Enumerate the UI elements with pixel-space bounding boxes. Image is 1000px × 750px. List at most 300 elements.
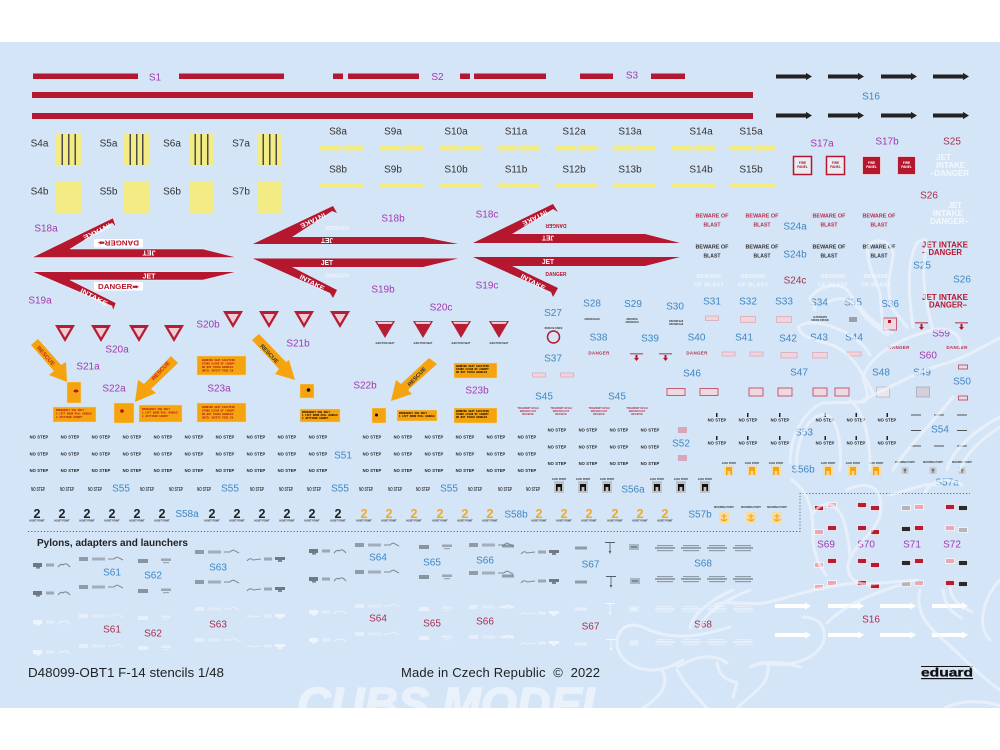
mooring point decals S57b xyxy=(688,506,787,523)
no step stencils S51: NO STEP xyxy=(425,452,444,456)
panel: small stencils S27 to S50: S59 xyxy=(932,328,950,340)
hoist point row S58a: 2 xyxy=(209,507,216,521)
panel: small stencils S27 to S50: S50 xyxy=(953,376,971,388)
labels S61 to S68: S62 xyxy=(144,628,162,640)
panel: small stencils S27 to S50: RECEIVE xyxy=(631,412,643,416)
intake arrow S19c: DANGER xyxy=(546,272,567,278)
hoist point row S58b: HOIST POINT xyxy=(632,520,648,522)
panel: S4 to S7 yellow patches xyxy=(31,134,282,213)
panel: fire panel decals S17: PANEL xyxy=(901,165,912,169)
jack point decals S56b xyxy=(722,462,884,476)
no step stencils S51: NO STEP xyxy=(61,468,80,473)
panel: beware of blast S24: BEWARE OF xyxy=(746,244,779,250)
panel: beware of blast S24: BLAST xyxy=(704,254,721,260)
hoist point row S58b: 2 xyxy=(361,507,368,521)
dotted section divider xyxy=(28,494,970,532)
panel: small markings S69 to S72: S71 xyxy=(903,540,921,550)
mooring point decals S57b: MOORING POINT xyxy=(767,506,787,509)
panel: beware of blast S24: S24a xyxy=(783,222,807,232)
no step stencils S51: NO STEP xyxy=(154,452,173,456)
labels S61 to S68: S68 xyxy=(694,620,712,630)
panel: jet intake danger stencils S25 S26: S25 xyxy=(943,136,961,148)
no step stencils S51: NO STEP xyxy=(216,434,235,440)
panel: S8 to S15 yellow bars: S11a xyxy=(505,126,528,138)
no step stencils S51: NO STEP xyxy=(487,434,506,440)
hoist point row S58b: 2 xyxy=(586,507,593,521)
panel: small stencils S27 to S50: ABCDEFGHI xyxy=(669,320,683,323)
triangles S20c with ejection seat text: EJECTION SEAT xyxy=(376,342,395,345)
S53 no step with arrow: NO STEP xyxy=(771,440,790,446)
panel: beware of blast S24: OF BLAST xyxy=(861,282,892,288)
no step stencils S51: NO STEP xyxy=(30,468,49,473)
outlined no step row S55: S55 xyxy=(331,484,349,494)
no step stencils S51: NO STEP xyxy=(641,444,660,450)
panel: beware of blast S24: BLAST xyxy=(870,254,888,260)
outlined no step row S55: S55 xyxy=(112,484,130,494)
panel: small stencils S27 to S50: S44 xyxy=(845,332,863,344)
panel: small stencils S27 to S50: BROADCAST xyxy=(629,409,646,413)
label S3: S3 xyxy=(626,70,639,82)
labels S61 to S68: S64 xyxy=(369,614,387,624)
panel: beware of blast S24: BEWARE xyxy=(740,274,766,280)
panel: fire panel decals S17: FIRE xyxy=(903,161,910,165)
S53 no step with arrow: NO STEP xyxy=(878,440,897,446)
panel: small stencils S27 to S50: BROADCAST xyxy=(591,409,608,413)
hoist point row S58a: 2 xyxy=(109,507,116,521)
panel: jet intake danger stencils S25 S26: DANGER– xyxy=(930,217,970,226)
panel: small stencils S27 to S50: S30 xyxy=(666,302,684,312)
labels S61 to S68: S66 xyxy=(476,616,494,628)
intake arrow S19c: JET xyxy=(542,259,555,266)
panel: beware of blast S24: S24b xyxy=(783,250,807,260)
panel: jet intake danger stencils S25 S26: DANGER– xyxy=(929,300,968,310)
no step stencils S51: NO STEP xyxy=(548,461,567,466)
orange placards red text: 2 JETTISON CANOPY xyxy=(56,416,83,419)
panel: S4 to S7 yellow patches: S4a xyxy=(31,138,49,150)
panel: fire panel decals S17: S17a xyxy=(810,138,834,150)
panel: small stencils S27 to S50: DANGER xyxy=(686,350,708,356)
panel: beware of blast S24: BEWARE OF xyxy=(862,214,896,220)
panel: small stencils S27 to S50: BROADCAST xyxy=(553,409,570,413)
mooring point decals S57a: MOORING POINT xyxy=(923,461,943,464)
labels S61 to S68: S68 xyxy=(694,558,712,570)
no step stencils S51: NO STEP xyxy=(30,452,49,456)
no step stencils S51: NO STEP xyxy=(425,468,444,473)
hoist point row S58a: 2 xyxy=(159,507,166,521)
hoist point row S58b: HOIST POINT xyxy=(657,520,673,522)
labels S20 to S23: S21b xyxy=(286,338,310,350)
panel: small stencils S27 to S50: S42 xyxy=(779,334,797,344)
panel: S8 to S15 yellow bars: S9b xyxy=(384,164,402,176)
panel: S8 to S15 yellow bars: S15b xyxy=(739,164,763,176)
mooring point decals S57a xyxy=(895,461,972,488)
footer: sheet code: D48099-OBT1 F-14 stencils 1/48 xyxy=(28,665,224,680)
no step stencils S51: NO STEP xyxy=(394,452,413,456)
hoist point row S58a: 2 xyxy=(134,507,141,521)
no step stencils S51: NO STEP xyxy=(487,452,506,456)
panel: beware of blast S24: BEWARE xyxy=(820,274,846,280)
panel: small stencils S27 to S50: S45 xyxy=(608,392,626,402)
panel: small stencils S27 to S50: TRANSMIT EFGH xyxy=(588,406,610,410)
labels S20 to S23: S20c xyxy=(430,302,452,314)
hoist point row S58b: 2 xyxy=(536,507,543,521)
panel: pylon stencils dark set xyxy=(33,542,753,597)
panel: beware of blast S24: BEWARE OF xyxy=(862,244,896,250)
orange placards red text: 1 LIFT DOOR PULL HANDLE xyxy=(56,412,92,416)
no step stencils S51: NO STEP xyxy=(456,452,475,456)
outlined no step row S55: S55 xyxy=(440,484,458,494)
panel: S8 to S15 yellow bars: S11b xyxy=(505,164,528,176)
no step stencils S51: NO STEP xyxy=(610,461,629,466)
labels S20 to S23: S22b xyxy=(353,380,377,392)
no step stencils S51: NO STEP xyxy=(394,434,413,440)
hoist point row S58b: HOIST POINT xyxy=(531,520,547,522)
panel: S8 to S15 yellow bars: S9a xyxy=(384,126,402,138)
panel: small stencils S27 to S50: ABCDEFGH xyxy=(625,321,639,324)
panel: small stencils S27 to S50: S37 xyxy=(544,354,562,364)
mooring point decals S57a: MOORING POINT xyxy=(952,461,972,464)
S53 no step with arrow: NO STEP xyxy=(708,418,727,422)
orange placards red text: WARNING SEAT EJECTION xyxy=(202,359,235,362)
no step stencils S51: NO STEP xyxy=(610,428,629,432)
hoist point row S58b: 2 xyxy=(411,507,418,521)
panel: small stencils S27 to S50: S33 xyxy=(775,296,793,308)
hoist point row S58a: HOIST POINT xyxy=(54,520,70,522)
panel: beware of blast S24: BEWARE xyxy=(864,274,889,280)
panel: small stencils S27 to S50: RECEIVE xyxy=(593,412,605,416)
labels S18 S19 xyxy=(28,210,498,306)
no step stencils S51: NO STEP xyxy=(363,434,382,440)
labels S18 S19: S19c xyxy=(476,280,498,292)
hoist point row S58b: HOIST POINT xyxy=(432,520,448,522)
S54 small stencils xyxy=(911,414,967,446)
orange placards red text: STAND CLEAR OF CANOPY xyxy=(202,410,235,412)
orange placards black text: WARNING SEAT EJECTION xyxy=(456,365,489,368)
no step stencils S51: NO STEP xyxy=(518,468,537,473)
panel: beware of blast S24: BLAST xyxy=(870,222,888,228)
panel: small markings S69 to S72 xyxy=(814,502,968,590)
circle stencil S27 xyxy=(548,331,560,343)
labels S20 to S23: S22a xyxy=(102,384,126,394)
labels S18 S19: S18c xyxy=(476,210,498,220)
intake arrow S19a xyxy=(32,272,237,311)
outlined no step row S55: NO STEP xyxy=(498,487,512,493)
no step stencils S51: NO STEP xyxy=(641,428,660,432)
intake arrow S18c: JET xyxy=(541,234,554,240)
panel: S8 to S15 yellow bars: S10a xyxy=(444,126,468,138)
panel: small stencils S27 to S50: ABCDEFGHIJ xyxy=(584,318,600,321)
hoist point row S58b: HOIST POINT xyxy=(581,520,597,522)
orange placards red text: WARNING SEAT EJECTION xyxy=(202,406,235,409)
panel: small stencils S27 to S50: S43 xyxy=(810,332,828,344)
hoist point row S58a xyxy=(29,507,346,522)
outlined no step row S55: NO STEP xyxy=(250,487,264,493)
panel: S4 to S7 yellow patches: S4b xyxy=(31,186,49,198)
S53 no step with arrow: NO STEP xyxy=(739,418,758,422)
panel: small markings S69 to S72: S70 xyxy=(857,540,875,550)
mooring point decals S57a: MOORING POINT xyxy=(895,461,915,464)
panel: S8 to S15 yellow bars: S13b xyxy=(618,164,642,176)
labels S61 to S68: S64 xyxy=(369,552,387,564)
panel: small stencils S27 to S50: RECEIVE xyxy=(555,412,567,416)
hoist point row S58a: HOIST POINT xyxy=(104,520,120,522)
labels S61 to S68: S65 xyxy=(423,618,441,630)
S53 no step with arrow: NO STEP xyxy=(847,440,866,446)
no step stencils S51: NO STEP xyxy=(123,468,142,473)
hoist point row S58a: HOIST POINT xyxy=(254,520,270,522)
rescue arrow S21b xyxy=(252,334,295,380)
panel: small stencils S27 to S50: S34 xyxy=(810,298,828,308)
orange placards red text: EMERGENCY USE ONLY xyxy=(142,408,170,411)
hoist point row S58b: HOIST POINT xyxy=(482,520,498,522)
outlined no step row S55: NO STEP xyxy=(468,487,482,493)
panel: beware of blast S24: BEWARE OF xyxy=(696,244,729,250)
panel: small stencils S27 to S50: S31 xyxy=(703,296,721,308)
outlined no step row S55: NO STEP xyxy=(388,487,402,493)
labels S18 S19: S18b xyxy=(381,214,405,224)
panel: beware of blast S24: BLAST xyxy=(754,254,771,260)
panel: fire panel decals S17: PANEL xyxy=(866,165,877,169)
outlined no step row S55: NO STEP xyxy=(279,487,293,493)
hoist point row S58a: HOIST POINT xyxy=(79,520,95,522)
jack point decals S56a: JACK POINT xyxy=(650,478,665,481)
orange placards red text: DO NOT TOUCH HANDLES xyxy=(202,366,234,369)
orange placards black text: 1 LIFT DOOR PULL HANDLE xyxy=(399,415,435,418)
jack point decals S56b: JACK POINT xyxy=(722,462,737,465)
jack point decals S56a: S56a xyxy=(621,484,645,496)
no step stencils S51: NO STEP xyxy=(185,452,204,456)
no step stencils S51: NO STEP xyxy=(487,468,506,473)
panel: small stencils S27 to S50: SPARE ROUND xyxy=(811,319,829,322)
intake arrow S18c: DANGER xyxy=(545,222,566,228)
no step stencils S51: NO STEP xyxy=(579,444,598,450)
intake arrow S18c: INTAKE xyxy=(520,208,548,227)
label S51: S51 xyxy=(334,450,352,462)
panel: fire panel decals S17: PANEL xyxy=(797,165,808,169)
hoist point row S58a: HOIST POINT xyxy=(330,520,346,522)
labels S61 to S68: S66 xyxy=(476,556,494,566)
rescue arrow S22b: RESCUE xyxy=(407,366,428,388)
labels S61 to S68 xyxy=(103,552,712,640)
no step stencils S51: NO STEP xyxy=(456,468,475,473)
S52 stencils and label: S52 xyxy=(672,438,690,450)
labels S20 to S23: S21a xyxy=(76,362,100,372)
panel: jet intake danger stencils S25 S26: JET xyxy=(948,201,962,210)
intake arrow S18b: JET xyxy=(320,236,333,243)
panel: beware of blast S24: BEWARE OF xyxy=(812,244,846,250)
panel: small stencils S27 to S50: DANGER xyxy=(946,345,968,350)
mooring point decals S57b: MOORING POINT xyxy=(714,506,734,509)
panel: small stencils S27 to S50: S35 xyxy=(844,298,862,308)
intake arrow S19b xyxy=(253,258,458,298)
panel: small stencils S27 to S50: S47 xyxy=(790,368,808,378)
outlined no step row S55: NO STEP xyxy=(169,487,183,493)
hoist point row S58b: 2 xyxy=(487,507,494,521)
panel: S4 to S7 yellow patches: S7b xyxy=(232,186,250,198)
panel: small stencils S27 to S50: ALTERNATE xyxy=(813,316,827,319)
panel: fire panel decals S17: FIRE xyxy=(799,161,806,165)
watermark: mascot outline and model text: CUBS MODEL xyxy=(297,678,610,730)
no step stencils S51: NO STEP xyxy=(61,452,80,456)
intake arrow S18b: DANGER xyxy=(325,224,349,230)
no step stencils S51: NO STEP xyxy=(278,468,297,473)
S54 small stencils: S54 xyxy=(931,424,949,436)
hoist point row S58a: 2 xyxy=(259,507,266,521)
labels S61 to S68: S67 xyxy=(582,622,600,632)
hoist point row S58b: 2 xyxy=(437,507,444,521)
hoist point row S58b: HOIST POINT xyxy=(607,520,623,522)
no step stencils S51: NO STEP xyxy=(518,452,537,456)
panel: jet intake danger stencils S25 S26: S25 xyxy=(913,260,931,272)
panel: S8 to S15 yellow bars: S12b xyxy=(562,164,586,176)
panel: fire panel decals S17: PANEL xyxy=(830,165,841,169)
jack point decals S56b: JACK POINT xyxy=(821,462,836,465)
intake arrow S19a: INTAKE xyxy=(79,288,109,308)
hoist point row S58b: 2 xyxy=(637,507,644,521)
jack point decals S56a: JACK POINT xyxy=(552,478,567,481)
panel: jet intake danger stencils S25 S26: S26 xyxy=(953,274,971,286)
labels S20 to S23: S20b xyxy=(196,320,220,330)
no step stencils S51: NO STEP xyxy=(309,452,328,456)
white arrows S16 xyxy=(775,602,968,639)
S53 no step with arrow: NO STEP xyxy=(771,418,790,422)
orange placards black text: EMERGENCY USE ONLY xyxy=(302,411,330,414)
no step stencils S51: NO STEP xyxy=(216,452,235,456)
no step stencils S51: NO STEP xyxy=(123,452,142,456)
orange placards black text: 2 JETTISON CANOPY xyxy=(302,417,329,420)
panel: jet intake danger stencils S25 S26: JET xyxy=(936,153,951,162)
hoist point row S58b xyxy=(356,507,673,522)
panel: S4 to S7 yellow patches: S6a xyxy=(163,138,181,150)
eduard logo: eduard xyxy=(921,666,973,680)
S53 no step with arrow: NO STEP xyxy=(847,418,866,422)
no step stencils S51: NO STEP xyxy=(216,468,235,473)
panel: S8 to S15 yellow bars: S10b xyxy=(444,164,468,176)
no step stencils S51: NO STEP xyxy=(185,434,204,440)
hoist point row S58b: HOIST POINT xyxy=(381,520,397,522)
intake arrow S18a: INTAKE xyxy=(81,221,112,241)
panel: small markings S69 to S72: S69 xyxy=(817,540,835,550)
outlined no step row S55: NO STEP xyxy=(416,487,430,493)
panel: beware of blast S24: BLAST xyxy=(754,222,771,228)
panel: small stencils S27 to S50: DANGER xyxy=(588,350,610,356)
no step stencils S51: NO STEP xyxy=(579,461,598,466)
orange placards red text: 1 LIFT DOOR PULL HANDLE xyxy=(142,412,178,414)
hoist point row S58a: HOIST POINT xyxy=(29,520,45,522)
panel: beware of blast S24: OF BLAST xyxy=(694,282,725,288)
no step stencils S51: NO STEP xyxy=(641,461,660,466)
panel: small stencils S27 to S50: S40 xyxy=(688,332,706,344)
no step stencils S51: NO STEP xyxy=(309,434,328,440)
panel: beware of blast S24: BEWARE xyxy=(696,274,722,280)
footer: made in czech republic: Made in Czech Republic © 2022 xyxy=(401,665,600,680)
label S16 blue: S16 xyxy=(862,92,880,102)
mooring point decals S57a: S57a xyxy=(935,478,959,488)
panel: small stencils S27 to S50: S46 xyxy=(683,368,701,380)
hoist point row S58a: 2 xyxy=(335,507,342,521)
rescue arrow S22b xyxy=(391,358,437,401)
jack point decals S56a: JACK POINT xyxy=(600,478,615,481)
hoist point row S58a: HOIST POINT xyxy=(129,520,145,522)
panel: jet intake danger stencils S25 S26: JET INTAKE xyxy=(922,293,969,302)
no step stencils S51: NO STEP xyxy=(363,452,382,456)
panel: S4 to S7 yellow patches: S6b xyxy=(163,186,181,198)
no step stencils S51: NO STEP xyxy=(278,434,297,440)
panel: beware of blast S24: OF BLAST xyxy=(818,282,849,288)
orange placards red text: EMERGENCY USE ONLY xyxy=(56,409,84,412)
no step stencils S51: NO STEP xyxy=(123,434,142,440)
hoist point row S58a: HOIST POINT xyxy=(154,520,170,522)
no step stencils S51 xyxy=(30,428,660,473)
orange placards black text: DO NOT TOUCH HANDLES xyxy=(456,371,488,374)
no step stencils S51: NO STEP xyxy=(309,468,328,473)
panel: small stencils S27 to S50: S48 xyxy=(872,368,890,378)
label S2: S2 xyxy=(431,72,444,83)
no step stencils S51: NO STEP xyxy=(247,468,266,473)
panel: small stencils S27 to S50: ABCDEFG xyxy=(626,318,638,321)
stripe S3 xyxy=(580,74,685,79)
intake arrow S19b: JET xyxy=(321,260,334,267)
panel: small stencils S27 to S50: RECEIVE xyxy=(522,412,534,416)
intake arrow S18b: INTAKE xyxy=(298,211,326,229)
panel: small stencils S27 to S50: BROADCAST xyxy=(520,409,537,413)
panel: small stencils S27 to S50: RESCUE KNIFE xyxy=(545,327,563,330)
outlined no step row S55: NO STEP xyxy=(140,487,154,493)
outlined no step row S55: NO STEP xyxy=(197,487,211,493)
intake arrow S18a xyxy=(32,218,237,258)
intake arrow S19a: JET xyxy=(142,274,156,280)
rescue arrow S21a: RESCUE xyxy=(35,345,56,368)
stripes S1 S2 S3 xyxy=(32,70,753,119)
triangles S20c with ejection seat text: EJECTION SEAT xyxy=(452,342,471,345)
intake arrow S19c: INTAKE xyxy=(519,273,547,292)
no step stencils S51: NO STEP xyxy=(30,434,49,440)
labels S18 S19: S19a xyxy=(28,296,52,306)
panel: S8 to S15 yellow bars xyxy=(319,126,775,188)
panel: small stencils S27 to S50: DANGER xyxy=(888,345,910,350)
hoist point row S58b: HOIST POINT xyxy=(356,520,372,522)
no step stencils S51: NO STEP xyxy=(548,444,567,450)
outlined no step row S55 xyxy=(31,484,540,494)
orange placards black text: 1 LIFT DOOR PULL HANDLE xyxy=(302,414,338,417)
hoist point row S58a: HOIST POINT xyxy=(204,520,220,522)
panel: small stencils S27 to S50: S39 xyxy=(641,334,659,344)
labels S61 to S68: S61 xyxy=(103,568,121,578)
panel: S8 to S15 yellow bars: S8a xyxy=(329,126,347,138)
orange placards red text: DO NOT TOUCH HANDLES xyxy=(202,413,234,416)
hoist point row S58b: 2 xyxy=(386,507,393,521)
S53 no step with arrow xyxy=(708,413,897,446)
label S16 red: S16 xyxy=(862,614,880,626)
labels S61 to S68: S61 xyxy=(103,624,121,636)
long red stripes xyxy=(32,92,753,119)
outlined no step row S55: NO STEP xyxy=(526,487,540,493)
outlined no step row S55: NO STEP xyxy=(60,487,74,493)
rescue arrow S21b: RESCUE xyxy=(258,343,279,365)
hoist point row S58b: S58b xyxy=(504,510,528,520)
panel: fire panel decals S17: FIRE xyxy=(868,161,875,165)
intake arrow S19b: INTAKE xyxy=(298,274,326,293)
no step stencils S51: NO STEP xyxy=(425,434,444,440)
panel: small stencils S27 to S50: S32 xyxy=(739,296,757,308)
panel: small stencils S27 to S50: S38 xyxy=(590,332,608,344)
no step stencils S51: NO STEP xyxy=(548,428,567,432)
no step stencils S51: NO STEP xyxy=(154,468,173,473)
S52 stencils and label xyxy=(672,427,690,461)
labels S18 S19: S19b xyxy=(371,284,395,296)
panel: small stencils S27 to S50: S27 xyxy=(544,308,562,319)
panel: small stencils S27 to S50: S28 xyxy=(583,298,601,310)
